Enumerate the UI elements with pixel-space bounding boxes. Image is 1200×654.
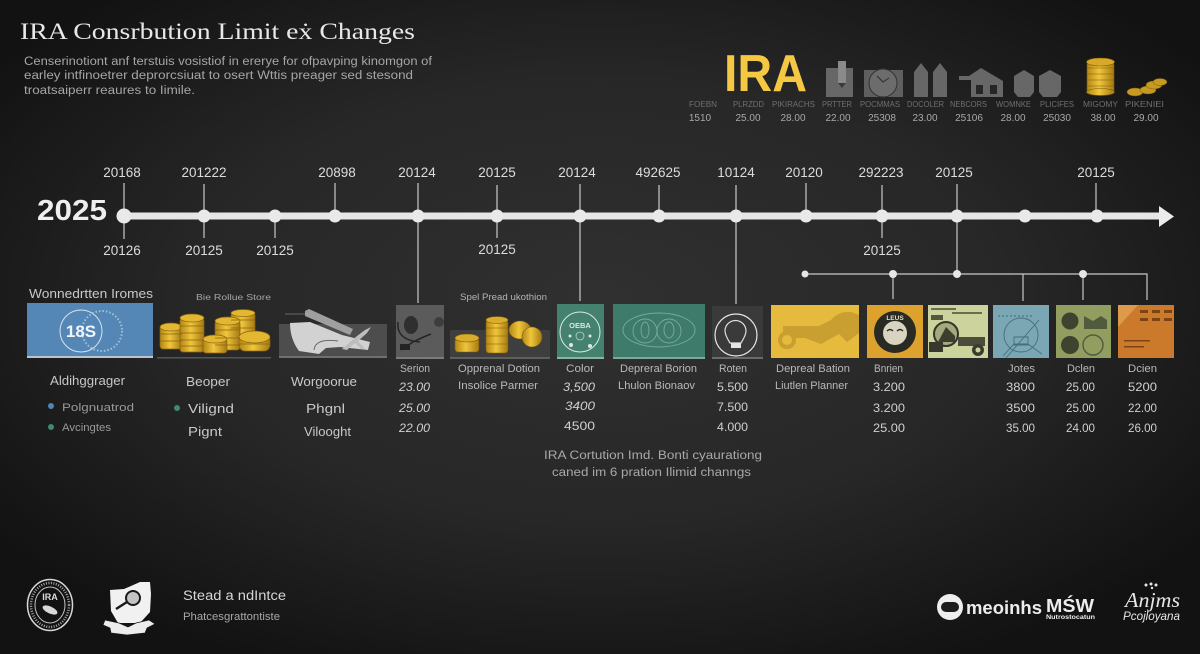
centre caption [544,450,762,479]
column text: Worgoorue [291,374,357,439]
top-right legend values: 25308 [868,113,896,124]
dates below axis: 20126 [103,243,141,258]
column text: Dclen: 25.00 [1066,401,1095,415]
column text: Dclen [1066,363,1095,435]
top-right legend values: 22.00 [825,113,851,124]
branch connector [802,270,1147,301]
column text: Jotes: Jotes [1008,363,1036,375]
column text: Beoper: Pignt [188,424,222,439]
column text: Dcien: 26.00 [1128,421,1157,435]
column text: Roten: 7.500 [717,400,748,414]
dates below axis: 20125 [863,243,901,258]
panel: pale green poster card [928,305,988,358]
icon: coin stack [1086,58,1114,96]
top-right legend labels: PLICIFES [1040,100,1074,109]
column text: Dclen: 25.00 [1066,380,1095,394]
top-right legend values: 29.00 [1133,113,1159,124]
column text: Color: Color [566,363,594,375]
panel: light bulb card [712,306,763,359]
column text: Bnrien [873,363,905,435]
dates above axis [103,165,1115,180]
top-right legend labels: FOEBN [689,100,717,109]
column text: Dcien: 5200 [1128,380,1157,394]
top-right legend values: 25030 [1043,113,1071,124]
column text: Color [563,363,595,433]
panel: teal seal card [557,304,604,359]
column text: Worgoorue: Vilooght [304,424,351,439]
column text: Roten: Roten [719,363,747,375]
top-right legend labels: POCMMAS [860,100,900,109]
top-right legend labels [689,100,1164,109]
column text: Jotes: 35.00 [1006,421,1035,435]
top-right legend values: 23.00 [912,113,938,124]
column text: Opprenal Dotion: Insolice Parmer [458,380,538,392]
dates above axis: 20125 [478,165,516,180]
icon: footer seal [28,580,72,630]
column text: Aldihggrager [48,373,134,434]
panel: blue card: Wonnedrtten Iromes [29,287,153,301]
column text: Roten: 5.500 [717,380,748,394]
column text: Jotes: 3500 [1006,401,1035,415]
centre caption: IRA Cortution Imd. Bonti cyaurationg [544,450,762,462]
dates above axis: 20120 [785,165,823,180]
column text: Opprenal Dotion [458,363,540,392]
column text: Depreral Borion: Lhulon Bionaov [618,380,696,392]
panel: orange badge card [867,305,923,358]
icon: small coins [1127,78,1167,96]
top-right legend labels: NEBCORS [950,100,987,109]
column text: Color: 4500 [564,419,595,433]
top-right legend labels: DOCOLER [907,100,944,109]
panel: coin piles card [157,292,271,358]
panel: coin piles card: Bie Rollue Store [196,292,271,302]
dates above axis: 492625 [635,165,681,180]
column text: Beoper [174,374,234,439]
column text: Bnrien: 25.00 [873,421,905,435]
footer text: Stead a ndIntce [183,588,286,603]
panel: scroll card [279,309,387,358]
intro text block: troatsaiperr reaures to Iimile. [24,85,195,97]
dates above axis: 20125 [1077,165,1115,180]
dates below axis: 20125 [185,243,223,258]
footer text [183,588,286,623]
column text: Opprenal Dotion: Opprenal Dotion [458,363,540,375]
column text: Dclen: Dclen [1067,363,1095,375]
dates above axis: 201222 [181,165,227,180]
icon: building [826,61,853,97]
column text: Dclen: 24.00 [1066,421,1095,435]
top-right legend labels: PIKIRACHS [772,100,815,109]
icon: shields [1014,70,1061,97]
panel: coins on grey card: Spel Pread ukothion [460,292,547,303]
column text: Color: 3,500 [563,380,595,394]
column text: Bnrien: 3.200 [873,380,905,394]
column text: Depreal Bation [775,363,850,392]
icon: footer seal: IRA [42,592,58,602]
panel: orange badge card: LEUS [886,315,904,322]
top-right legend values [689,113,1159,124]
top-right legend labels: PRTTER [822,100,852,109]
column text: Serion: 22.00 [398,421,430,435]
panel: teal wide card [613,304,705,359]
column text: Aldihggrager: Avcingtes [62,422,112,434]
panel: olive card [1056,305,1111,358]
footer logo: medinhs: meoinhs [966,598,1042,618]
icon: house [959,68,1003,97]
panel: pale blue card [993,305,1049,358]
footer logo: Anjms: Pcojloyana [1123,609,1180,623]
intro text block: earley intfinoetrer deprorcsiuat to osert Wttis preager sed stesond [24,70,413,82]
dates below axis [103,242,901,258]
column text: Aldihggrager: Aldihggrager [50,373,126,388]
column text: Dcien: Dcien [1128,363,1157,375]
dates above axis: 20124 [398,165,436,180]
column text: Depreral Borion: Depreral Borion [620,363,697,375]
top-right legend labels: WOMNKE [996,100,1031,109]
column text: Depreral Borion [618,363,697,392]
centre caption: caned im 6 pration Ilimid channgs [552,467,751,479]
icon: silos [914,63,947,97]
timeline axis with nodes and arrow [116,183,1174,304]
top-right legend values: 28.00 [780,113,806,124]
top-right legend labels: PIKENIEI [1125,100,1164,109]
top-right legend values: 25106 [955,113,983,124]
dates above axis: 20168 [103,165,141,180]
panel: yellow card [771,305,859,358]
panel: teal seal card: OEBA [569,321,591,330]
dates above axis: 10124 [717,165,755,180]
column text: Dcien: 22.00 [1128,401,1157,415]
top-right legend values: 38.00 [1090,113,1116,124]
footer logo: Anjms [1123,582,1180,623]
top-right legend labels: MIGOMY [1083,100,1119,109]
icon: clock [864,69,903,97]
footer logo: Anjms: Anjms [1123,588,1180,612]
start year: 2025 [37,195,107,227]
footer logo: MSW [1046,595,1095,621]
column text: Jotes: 3800 [1006,380,1035,394]
column text: Bnrien: Bnrien [874,363,903,375]
column text: Roten [717,363,748,434]
dates above axis: 20898 [318,165,356,180]
column text: Aldihggrager: Polgnuatrod [62,402,134,414]
column text: Serion: Serion [400,363,430,375]
panel: coins on grey card [450,292,550,359]
panel: blue card: 18S [66,322,96,341]
column text: Worgoorue: Worgoorue [291,374,357,389]
icon: footer shield with magnifier [103,582,155,635]
panel: orange poster card [1118,305,1174,358]
column text: Roten: 4.000 [717,420,748,434]
dates above axis: 20124 [558,165,596,180]
dates above axis: 292223 [858,165,904,180]
top-right legend labels: PLRZDD [733,100,764,109]
column text: Serion [398,363,430,435]
column text: Serion: 23.00 [398,380,430,394]
column text: Worgoorue: Phgnl [306,401,345,416]
column text: Beoper: Vilignd [188,401,234,416]
column text: Serion: 25.00 [398,401,430,415]
column text: Color: 3400 [565,399,595,413]
column text: Dcien [1128,363,1157,435]
column text: Bnrien: 3.200 [873,401,905,415]
top-right legend values: 25.00 [735,113,761,124]
dates above axis: 20125 [935,165,973,180]
footer logo: medinhs [937,594,1042,620]
IRA logo heading: IRA [724,45,807,103]
top-right legend values: 1510 [689,113,712,124]
dates below axis: 20125 [256,243,294,258]
intro text block [24,56,433,97]
footer text: Phatcesgrattontiste [183,611,280,623]
column text: Depreal Bation: Liutlen Planner [775,380,848,392]
panel: portrait card [396,305,444,359]
column text: Beoper: Beoper [186,374,231,389]
footer logo: MSW: Nutrostocatun [1046,614,1095,621]
dates below axis: 20125 [478,242,516,257]
title: IRA Consrbution Limit eẋ Changes [20,19,415,44]
footer logo: MSW: MŚW [1046,595,1094,616]
intro text block: Censerinotiont anf terstuis vosistiof in ererye for ofpavping kinomgon of [24,56,433,68]
panel: blue card [27,287,153,358]
top-right legend values: 28.00 [1000,113,1026,124]
column text: Depreal Bation: Depreal Bation [776,363,850,375]
column text: Jotes [1006,363,1036,435]
